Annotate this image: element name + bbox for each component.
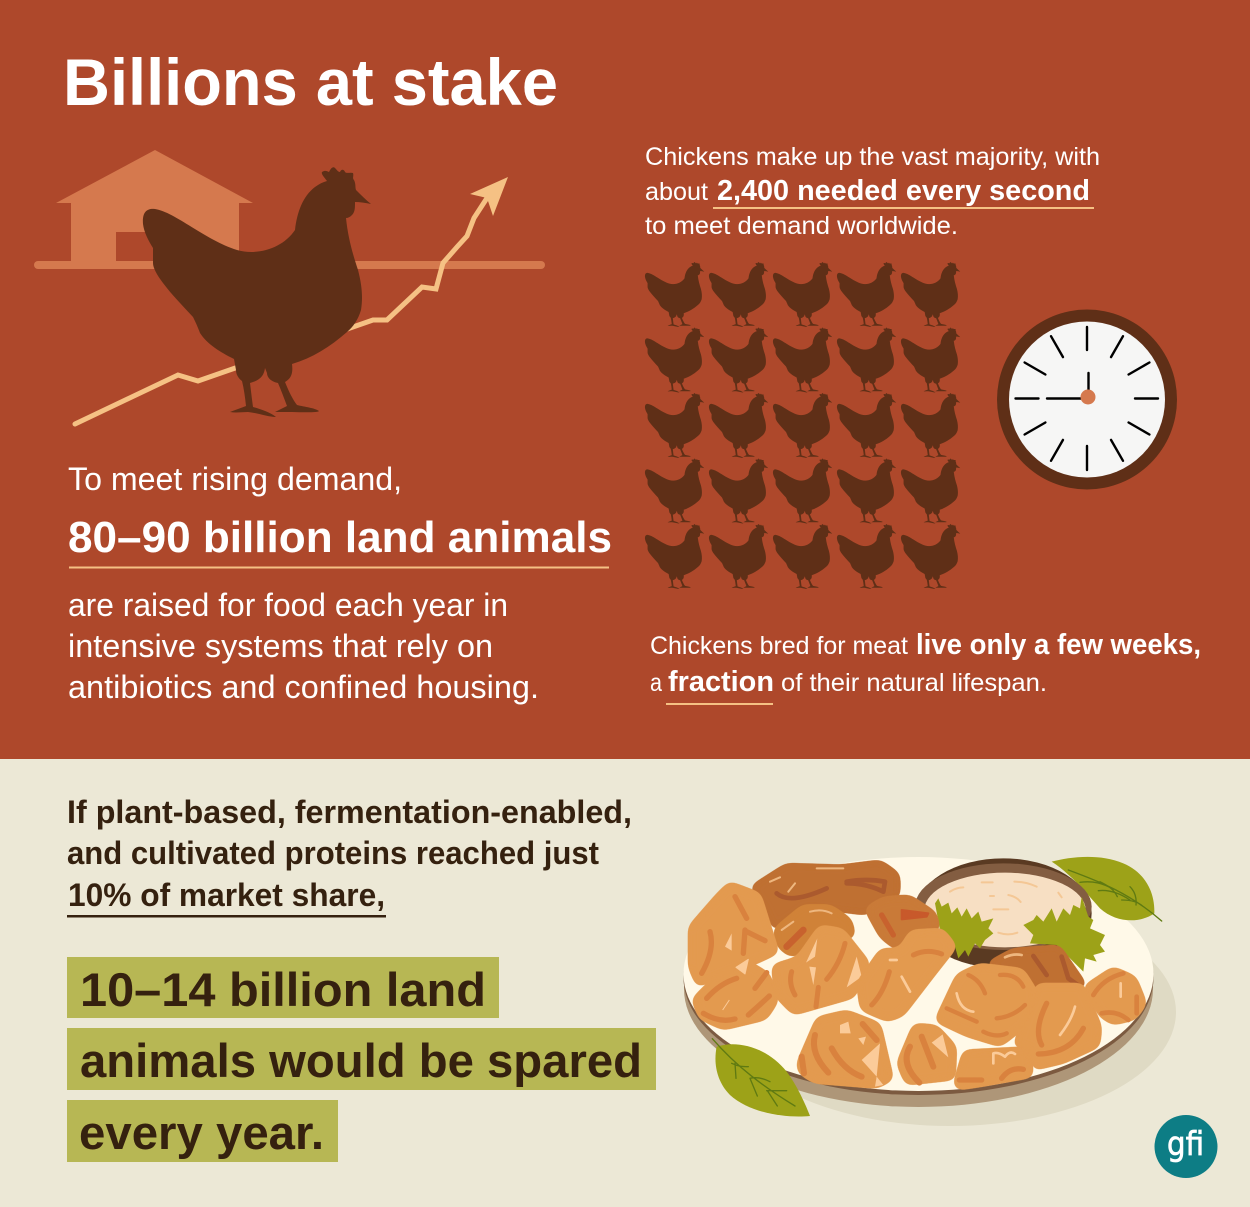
icon grid: 25 small hens [645, 262, 960, 589]
panel: bottom cream background [0, 759, 1250, 1207]
text block: rising demand: are raised for food each year in [68, 587, 508, 623]
text block: lifespan: of their natural lifespan. [781, 669, 1047, 697]
text block: lifespan: a [650, 669, 662, 697]
logo: gfi: gfi [1167, 1124, 1204, 1163]
callout: animals spared: 10–14 billion land [80, 963, 486, 1016]
illustration: barn, hen and rising demand chart [34, 150, 545, 424]
text block: chickens per second: Chickens make up the vast majority, with [645, 143, 1100, 171]
text block: rising demand: antibiotics and confined housing. [68, 669, 539, 705]
arrow: rising trend line [75, 177, 508, 424]
text block: lifespan: live only a few weeks, [916, 629, 1201, 661]
text block: rising demand [68, 461, 612, 705]
leaf: upper right [1052, 857, 1162, 921]
text block: chickens per second: to meet demand worldwide. [645, 212, 958, 240]
text block: market share [67, 794, 632, 918]
text block: market share: and cultivated proteins reached just [67, 835, 599, 871]
icon: large hen silhouette [143, 167, 371, 417]
nuggets: left group [691, 863, 1031, 1087]
text block: lifespan: Chickens bred for meat [650, 632, 908, 660]
text block: lifespan: fraction [668, 666, 774, 698]
title: Billions at stake [63, 45, 558, 119]
text block: market share: If plant-based, fermentation-enabled, [67, 794, 632, 830]
callout: animals spared: every year. [79, 1106, 324, 1159]
plate [684, 857, 1154, 1107]
plate shadow [724, 898, 1176, 1126]
text block: chickens per second: 2,400 needed every second [717, 175, 1090, 207]
callout: animals spared: animals would be spared [80, 1034, 642, 1087]
text block: rising demand: To meet rising demand, [68, 461, 402, 497]
callout: animals spared [67, 957, 656, 1162]
ground line [34, 261, 545, 269]
garnish: lettuce [935, 897, 1105, 972]
illustration: plate of plant-based nuggets [684, 857, 1176, 1126]
icon: barn [56, 150, 253, 262]
panel: top rust background [0, 0, 1250, 759]
text block: market share: 10% of market share, [68, 877, 385, 913]
text block: lifespan [650, 629, 1201, 705]
text block: rising demand: 80–90 billion land animals [68, 513, 612, 562]
leaf: lower left [712, 1039, 810, 1117]
nuggets: right group [938, 948, 1144, 1067]
icon: clock [997, 310, 1177, 490]
text block: rising demand: intensive systems that rely on [68, 628, 493, 664]
text block: chickens per second [645, 143, 1100, 240]
text block: chickens per second: about [645, 178, 708, 206]
logo: gfi [1154, 1115, 1218, 1178]
bowl of sauce [915, 858, 1092, 968]
